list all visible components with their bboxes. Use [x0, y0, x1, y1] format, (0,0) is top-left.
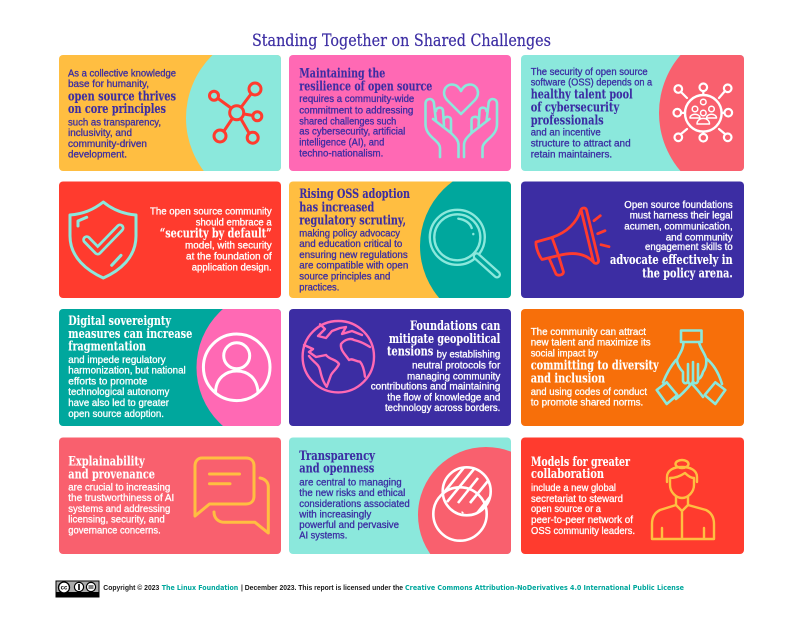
icon: speech bubbles	[195, 458, 268, 533]
text: regulatory scrutiny: and education critical to	[299, 239, 403, 250]
text: explainability: licensing, security, and	[68, 515, 165, 526]
text: geopolitical tensions: contributions and maintaining	[371, 381, 500, 392]
text: transparency: are central to managing	[299, 477, 402, 488]
text: regulatory scrutiny: source principles and	[299, 272, 390, 283]
footer: license badge	[56, 581, 99, 597]
text: explainability	[68, 454, 174, 537]
text: security by default: model, with security	[185, 241, 272, 252]
text: collaboration: include a new global	[531, 483, 616, 494]
text: security by default: should embrace a	[196, 217, 272, 228]
text: policy advocacy: the policy arena.	[642, 266, 733, 281]
text: digital sovereignty: harmonization, but national	[68, 366, 186, 377]
text: collaboration: OSS community leaders.	[531, 526, 635, 537]
text: collaboration: secretariat to steward	[531, 494, 623, 505]
text: regulatory scrutiny: regulatory scrutiny,	[299, 214, 406, 229]
text: diversity and inclusion	[531, 327, 659, 409]
text: security by default: at the foundation of	[186, 252, 272, 263]
text: regulatory scrutiny: Rising OSS adoption	[299, 187, 411, 202]
text: geopolitical tensions: mitigate geopolitical	[389, 332, 500, 347]
panel: regulatory scrutiny	[289, 182, 511, 298]
icon: shield with check	[70, 202, 136, 278]
text: diversity and inclusion: The community can attract	[531, 327, 646, 338]
text: geopolitical tensions: the flow of knowledge and	[387, 392, 500, 403]
text: diversity and inclusion: social impact by	[531, 349, 598, 360]
text: diversity and inclusion: committing to diversity	[531, 358, 659, 373]
text: geopolitical tensions: tensions	[387, 345, 433, 360]
text: explainability: Explainability	[68, 454, 145, 469]
text: diversity and inclusion: and using codes of conduct	[531, 387, 647, 398]
panel: security by default	[59, 182, 281, 298]
text: policy advocacy	[610, 200, 733, 281]
text: geopolitical tensions: neutral protocols for	[412, 361, 501, 372]
text: collaboration: Models for greater	[531, 455, 630, 470]
text: collaboration: peer-to-peer network of	[531, 515, 633, 526]
text: explainability: and provenance	[68, 467, 155, 482]
text: collaboration	[531, 455, 635, 537]
footer: copyright line: The Linux Foundation	[162, 584, 238, 592]
icon: talent network	[674, 84, 732, 142]
text: transparency: and openness	[299, 461, 374, 476]
text: core principles: open source thrives	[68, 90, 176, 104]
text: core principles: development.	[68, 150, 127, 161]
text: cybersecurity talent: software (OSS) depends on a	[531, 77, 653, 88]
text: regulatory scrutiny: ensuring new regulations	[299, 250, 408, 261]
text: resilience: as cybersecurity, artificial	[299, 127, 405, 138]
icon: magnifying glass	[430, 210, 497, 274]
text: policy advocacy: acumen, communication,	[624, 222, 733, 233]
text: geopolitical tensions: Foundations can	[410, 319, 501, 334]
text: explainability: are crucial to increasing	[68, 482, 170, 493]
panel: diversity and inclusion	[521, 309, 744, 426]
text: cybersecurity talent: The security of open source	[531, 67, 648, 78]
text: security by default: The open source community	[150, 207, 272, 218]
text: core principles: inclusivity, and	[68, 128, 132, 139]
text: transparency	[298, 449, 410, 542]
text: explainability: systems and addressing	[68, 504, 170, 515]
text: core principles: such as transparency,	[68, 118, 161, 129]
text: regulatory scrutiny: practices.	[299, 282, 339, 293]
text: diversity and inclusion: new talent and maximize its	[531, 338, 651, 349]
text: cybersecurity talent: and an incentive	[531, 128, 601, 139]
footer: copyright line: Creative Commons Attribution-NoDerivatives 4.0 International Public License	[405, 584, 684, 592]
text: digital sovereignty: have also led to greater	[68, 398, 170, 409]
text: regulatory scrutiny	[299, 187, 411, 293]
text: cybersecurity talent: structure to attract and	[531, 138, 631, 149]
text: resilience: shared challenges such	[299, 116, 396, 127]
text: geopolitical tensions: by establishing	[437, 350, 500, 361]
text: collaboration: collaboration	[531, 467, 605, 482]
text: cybersecurity talent: healthy talent pool	[531, 87, 633, 102]
panel: resilience	[289, 55, 511, 171]
icon: megaphone	[536, 208, 609, 275]
text: resilience: commitment to addressing	[299, 105, 413, 116]
panel: core principles	[59, 55, 281, 171]
text: explainability: governance concerns.	[68, 526, 161, 537]
text: digital sovereignty	[68, 314, 192, 420]
text: policy advocacy: must harness their legal	[630, 211, 733, 222]
text: cybersecurity talent: of cybersecurity	[531, 100, 620, 115]
panel: transparency	[289, 438, 511, 554]
text: policy advocacy: and community	[666, 232, 733, 243]
icon: user	[203, 334, 270, 401]
text: regulatory scrutiny: are compatible with open	[299, 261, 408, 272]
text: resilience: intelligence (AI), and	[299, 138, 384, 149]
panel: explainability	[59, 438, 281, 554]
text: transparency: powerful and pervasive	[299, 520, 399, 531]
text: digital sovereignty: measures can increase	[68, 327, 192, 342]
text: core principles	[68, 68, 176, 161]
panel: collaboration	[521, 438, 744, 554]
panel: digital sovereignty	[59, 309, 281, 426]
text: core principles: As a collective knowledge	[68, 68, 176, 80]
text: resilience: resilience of open source	[299, 80, 432, 95]
text: diversity and inclusion: and inclusion	[531, 372, 606, 387]
icon: overlapping circles	[432, 466, 492, 542]
icon: network	[210, 83, 262, 143]
text: digital sovereignty: open source adoption.	[68, 409, 164, 420]
title: Standing Together on Shared Challenges	[252, 31, 551, 51]
text: digital sovereignty: Digital sovereignty	[68, 314, 171, 329]
text: regulatory scrutiny: has increased	[299, 200, 374, 215]
icon: joined hands	[657, 330, 725, 404]
text: transparency: Transparency	[299, 449, 375, 464]
text: regulatory scrutiny: making policy advocacy	[299, 228, 400, 239]
text: cybersecurity talent: retain maintainers.	[531, 149, 612, 160]
text: transparency: with increasingly	[298, 510, 371, 521]
text: core principles: on core principles	[68, 102, 166, 117]
text: security by default: application design.	[192, 263, 272, 274]
footer: copyright line: | December 2023. This report is licensed under the	[241, 585, 403, 592]
text: cybersecurity talent: professionals	[531, 113, 604, 128]
icon: person with hair bun	[652, 460, 714, 539]
text: digital sovereignty: and impede regulatory	[68, 355, 166, 366]
text: resilience: techno-nationalism.	[299, 149, 383, 160]
panel: geopolitical tensions	[289, 309, 511, 426]
panel: cybersecurity talent	[521, 55, 744, 171]
icon: hands holding heart	[426, 84, 497, 157]
text: digital sovereignty: technological autonomy	[68, 387, 169, 398]
text: digital sovereignty: efforts to promote	[68, 377, 148, 388]
footer: license badge: cc	[61, 586, 68, 592]
text: policy advocacy: Open source foundations	[624, 200, 733, 211]
text: explainability: the trustworthiness of AI	[68, 493, 174, 504]
text: transparency: AI systems.	[299, 531, 347, 542]
text: geopolitical tensions	[371, 319, 501, 414]
text: core principles: base for humanity,	[68, 79, 149, 90]
text: geopolitical tensions: managing community	[407, 372, 500, 383]
icon: globe	[303, 321, 374, 392]
text: transparency: considerations associated	[299, 499, 410, 510]
text: resilience	[299, 67, 432, 160]
text: resilience: Maintaining the	[299, 67, 385, 82]
text: policy advocacy: advocate effectively in	[610, 253, 733, 268]
text: security by default	[150, 207, 272, 274]
text: diversity and inclusion: to promote shared norms.	[531, 398, 643, 409]
footer: copyright line: Copyright © 2023	[103, 584, 159, 592]
footer: copyright line	[103, 584, 684, 592]
panel: policy advocacy	[521, 182, 744, 298]
text: collaboration: open source or a	[531, 504, 601, 515]
text: security by default: “security by default”	[160, 226, 272, 241]
text: policy advocacy: engagement skills to	[645, 242, 733, 253]
text: transparency: the new risks and ethical	[299, 488, 405, 499]
text: resilience: requires a community-wide	[299, 94, 415, 105]
text: geopolitical tensions: technology across borders.	[385, 403, 500, 414]
text: cybersecurity talent	[531, 67, 653, 160]
text: core principles: community-driven	[68, 139, 147, 150]
text: digital sovereignty: fragmentation	[68, 340, 147, 355]
